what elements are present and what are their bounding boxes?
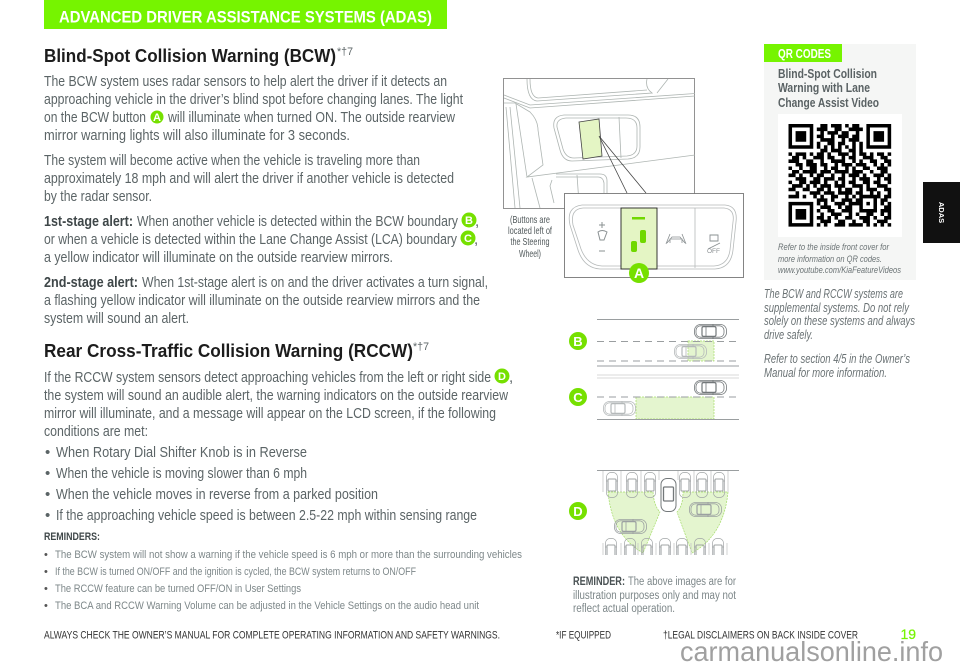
heading: Rear Cross-Traffic Collision Warning: *†7	[413, 341, 429, 353]
header banner	[44, 0, 447, 29]
QR panel title	[778, 67, 879, 110]
text block: RCCW intro: mirror will illuminate, and a message will appear on the LCD screen, if the following	[44, 405, 496, 422]
text block: BCW intro: approaching vehicle in the driver’s blind spot before changing lanes. The light	[44, 91, 464, 108]
text block: BCW activation: The system will become active when the vehicle is traveling more than	[44, 152, 420, 169]
inset: BCW button close-up	[564, 194, 744, 278]
bulleted conditions list: •	[45, 465, 50, 482]
reminder note: illustration purposes only and may not	[573, 590, 737, 602]
badge D: D	[573, 504, 583, 519]
text block: RCCW intro	[44, 368, 513, 440]
badge B	[569, 332, 587, 350]
QR label tab	[764, 44, 842, 62]
caption: button location: Wheel)	[519, 248, 541, 260]
text block: BCW activation: approximately 18 mph and will alert the driver if another vehicle is detected	[44, 170, 454, 187]
reminders list	[44, 531, 522, 612]
caption: button location: the Steering	[510, 236, 550, 248]
watermark: carmanualsonline.info	[680, 636, 943, 667]
diagram: BCW boundary	[597, 320, 739, 366]
QR panel title: Change Assist Video	[778, 96, 879, 110]
reminders list: •	[44, 600, 48, 612]
QR reference note: www.youtube.com/KiaFeatureVideos	[778, 265, 901, 276]
reminders list: •	[44, 583, 48, 595]
caption: button location: (Buttons are	[510, 214, 550, 226]
heading: Blind-Spot Collision Warning: Blind-Spot Collision Warning (BCW)	[44, 45, 336, 66]
bulleted conditions list: •	[45, 486, 50, 503]
badge A	[629, 263, 649, 283]
side note: supplemental systems: drive safely.	[764, 328, 813, 342]
reminders list: The RCCW feature can be turned OFF/ON in User Settings	[55, 583, 301, 595]
reminders list: If the BCW is turned ON/OFF and the ignition is cycled, the BCW system returns to ON/OFF	[55, 566, 416, 578]
text block: 1st-stage alert	[44, 212, 479, 266]
side tab: ADAS	[923, 182, 960, 243]
bulleted conditions list: When Rotary Dial Shifter Knob is in Reverse	[56, 444, 307, 461]
badge C	[569, 388, 587, 406]
footer disclaimers: †LEGAL DISCLAIMERS ON BACK INSIDE COVER	[663, 630, 858, 642]
badge B: B	[573, 334, 583, 349]
text block: BCW intro: A	[153, 112, 161, 124]
footer disclaimers: ALWAYS CHECK THE OWNER’S MANUAL FOR COMPLETE OPERATING INFORMATION AND SAFETY WARNINGS.	[44, 630, 500, 642]
diagram: LCA boundary	[597, 375, 739, 420]
heading: Blind-Spot Collision Warning: *†7	[337, 46, 353, 58]
bulleted conditions list: If the approaching vehicle speed is between 2.5-22 mph within sensing range	[56, 507, 477, 524]
badge C: C	[573, 390, 583, 405]
bulleted conditions list: •	[45, 444, 50, 461]
text block: 2nd-stage alert: When 1st-stage alert is on and the driver activates a turn signal,	[142, 274, 488, 291]
reminders list: The BCW system will not show a warning if the vehicle speed is 6 mph or more than the surrounding vehicles	[55, 549, 522, 561]
illustration: BCW button location	[504, 78, 695, 208]
text block: 1st-stage alert: ,	[474, 231, 478, 248]
diagram: RCCW parking lot	[597, 470, 739, 564]
reminders list: •	[44, 566, 48, 578]
text block: BCW activation	[44, 152, 454, 205]
reminder note: reflect actual operation.	[573, 603, 675, 615]
badge D	[569, 502, 587, 520]
QR reference note	[778, 242, 901, 276]
text block: BCW activation: by the radar sensor.	[44, 188, 152, 205]
text block: 1st-stage alert: or when a vehicle is detected within the Lane Change Assist (LCA) boundary	[44, 231, 457, 248]
text block: 1st-stage alert: B	[465, 215, 473, 227]
text block: 1st-stage alert: a yellow indicator will illuminate on the outside rearview mirrors.	[44, 249, 393, 266]
badge A: A	[634, 265, 644, 281]
text block: 2nd-stage alert: a flashing yellow indicator will illuminate on the outside rearview mirrors and the	[44, 292, 480, 309]
QR reference note: more information on QR codes.	[778, 254, 882, 265]
footer disclaimers: *IF EQUIPPED	[556, 630, 611, 642]
text block: 1st-stage alert: When another vehicle is detected within the BCW boundary	[137, 213, 458, 230]
QR panel title: Warning with Lane	[778, 81, 870, 95]
QR panel title: Blind-Spot Collision	[778, 67, 877, 81]
QR reference note: Refer to the inside front cover for	[778, 242, 890, 253]
text block: 2nd-stage alert: 2nd-stage alert:	[44, 274, 138, 291]
text block: 2nd-stage alert: system will sound an alert.	[44, 310, 189, 327]
text block: 1st-stage alert: 1st-stage alert:	[44, 213, 133, 230]
side note: supplemental systems: solely on these systems and always	[764, 314, 915, 328]
reminders list: The BCA and RCCW Warning Volume can be adjusted in the Vehicle Settings on the audio head unit	[55, 600, 479, 612]
bulleted conditions list	[45, 444, 477, 524]
text block: BCW intro: mirror warning lights will also illuminate for 3 seconds.	[44, 127, 350, 144]
text block: BCW intro: will illuminate when turned ON. The outside rearview	[167, 109, 455, 126]
side note: supplemental systems: Manual for more information.	[764, 366, 887, 380]
reminder note: REMINDER:	[573, 576, 625, 588]
side note: supplemental systems: supplemental systems. Do not rely	[764, 301, 910, 315]
caption: button location: located left of	[508, 225, 552, 237]
text block: RCCW intro: ,	[509, 369, 513, 386]
reminder note: The above images are for	[628, 576, 736, 588]
text block: RCCW intro: the system will sound an audible alert, the warning indicators on the outside rearview	[44, 387, 508, 404]
bulleted conditions list: When the vehicle moves in reverse from a parked position	[56, 486, 378, 503]
side note: supplemental systems: Refer to section 4/5 in the Owner’s	[764, 352, 910, 366]
text block: BCW intro	[44, 73, 464, 144]
side note: supplemental systems	[764, 287, 915, 380]
side tab: ADAS: ADAS	[937, 202, 946, 223]
reminders list: •	[44, 549, 48, 561]
text block: BCW intro: The BCW system uses radar sensors to help alert the driver if it detects an	[44, 73, 447, 90]
side note: supplemental systems: The BCW and RCCW systems are	[764, 287, 903, 301]
reminders list: REMINDERS:	[44, 531, 100, 543]
heading: Rear Cross-Traffic Collision Warning: Rear Cross-Traffic Collision Warning (RCCW)	[44, 340, 413, 361]
text block: BCW intro: on the BCW button	[44, 109, 146, 126]
text block: 2nd-stage alert	[44, 274, 488, 327]
text block: 1st-stage alert: C	[464, 233, 472, 245]
text block: RCCW intro: conditions are met:	[44, 423, 148, 440]
text block: RCCW intro: D	[498, 371, 506, 383]
header banner: ADVANCED DRIVER ASSISTANCE SYSTEMS (ADAS)	[59, 8, 432, 26]
text block: RCCW intro: If the RCCW system sensors detect approaching vehicles from the left or right side	[44, 369, 491, 386]
page number: 19	[900, 626, 916, 642]
QR label tab: QR CODES	[778, 47, 831, 61]
panel: QR codes	[764, 44, 916, 280]
QR code	[778, 114, 902, 237]
bulleted conditions list: •	[45, 507, 50, 524]
bulleted conditions list: When the vehicle is moving slower than 6 mph	[56, 465, 307, 482]
text block: 1st-stage alert: ,	[475, 213, 479, 230]
caption: button location	[508, 214, 552, 260]
inset: BCW button close-up: OFF	[707, 248, 720, 255]
reminder note	[573, 576, 737, 615]
